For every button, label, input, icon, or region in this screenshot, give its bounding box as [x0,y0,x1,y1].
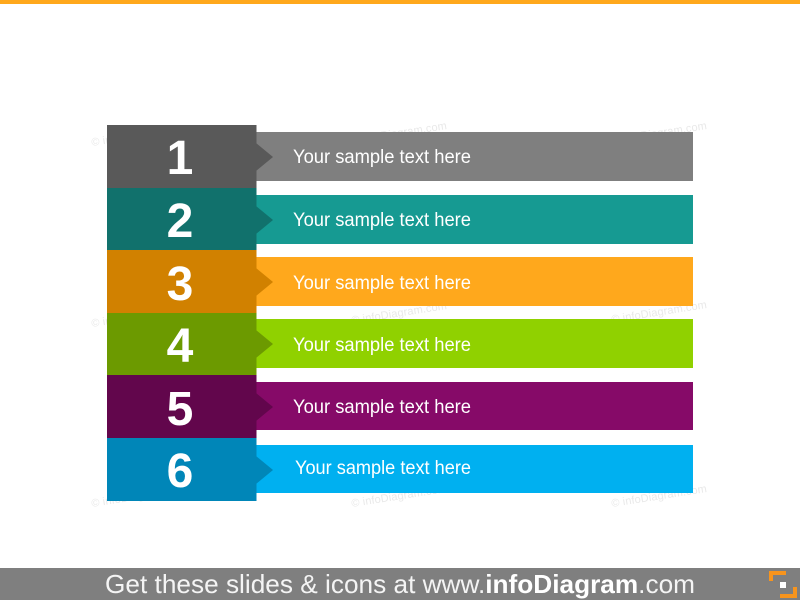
row 2: teal: 2 [167,195,193,248]
row 5: purple: Your sample text here [293,397,471,418]
row 3: orange [107,250,693,313]
row 2: teal [107,188,693,250]
footer banner: Get these slides & icons at www.infoDiagram.com [105,569,695,599]
watermarks: © infoDiagram.com [351,120,448,147]
watermarks: © infoDiagram.com [91,303,188,330]
row 6: blue: 6 [167,445,193,498]
row 3: orange: 3 [167,258,193,311]
watermarks: © infoDiagram.com [611,483,708,510]
row 3: orange: Your sample text here [293,273,471,294]
icon: logo [771,573,795,596]
top accent bar [0,0,800,4]
watermarks [91,120,708,510]
watermarks: © infoDiagram.com [91,483,188,510]
row 1: grey: 1 [167,132,193,185]
row 5: purple: 5 [167,383,193,436]
row 4: green [107,313,693,375]
row 1: grey [107,125,693,188]
row 4: green: Your sample text here [293,335,471,356]
watermarks: © infoDiagram.com [351,300,448,327]
watermarks: © infoDiagram.com [611,299,708,326]
watermarks: © infoDiagram.com [91,122,188,149]
row 6: blue: Your sample text here [295,458,471,479]
row 5: purple [107,375,693,438]
footer banner [0,568,800,600]
watermarks: © infoDiagram.com [351,483,448,510]
row 4: green: 4 [167,320,194,373]
row 6: blue [107,438,693,501]
row 2: teal: Your sample text here [293,210,471,231]
row 1: grey: Your sample text here [293,147,471,168]
watermarks: © infoDiagram.com [611,120,708,147]
